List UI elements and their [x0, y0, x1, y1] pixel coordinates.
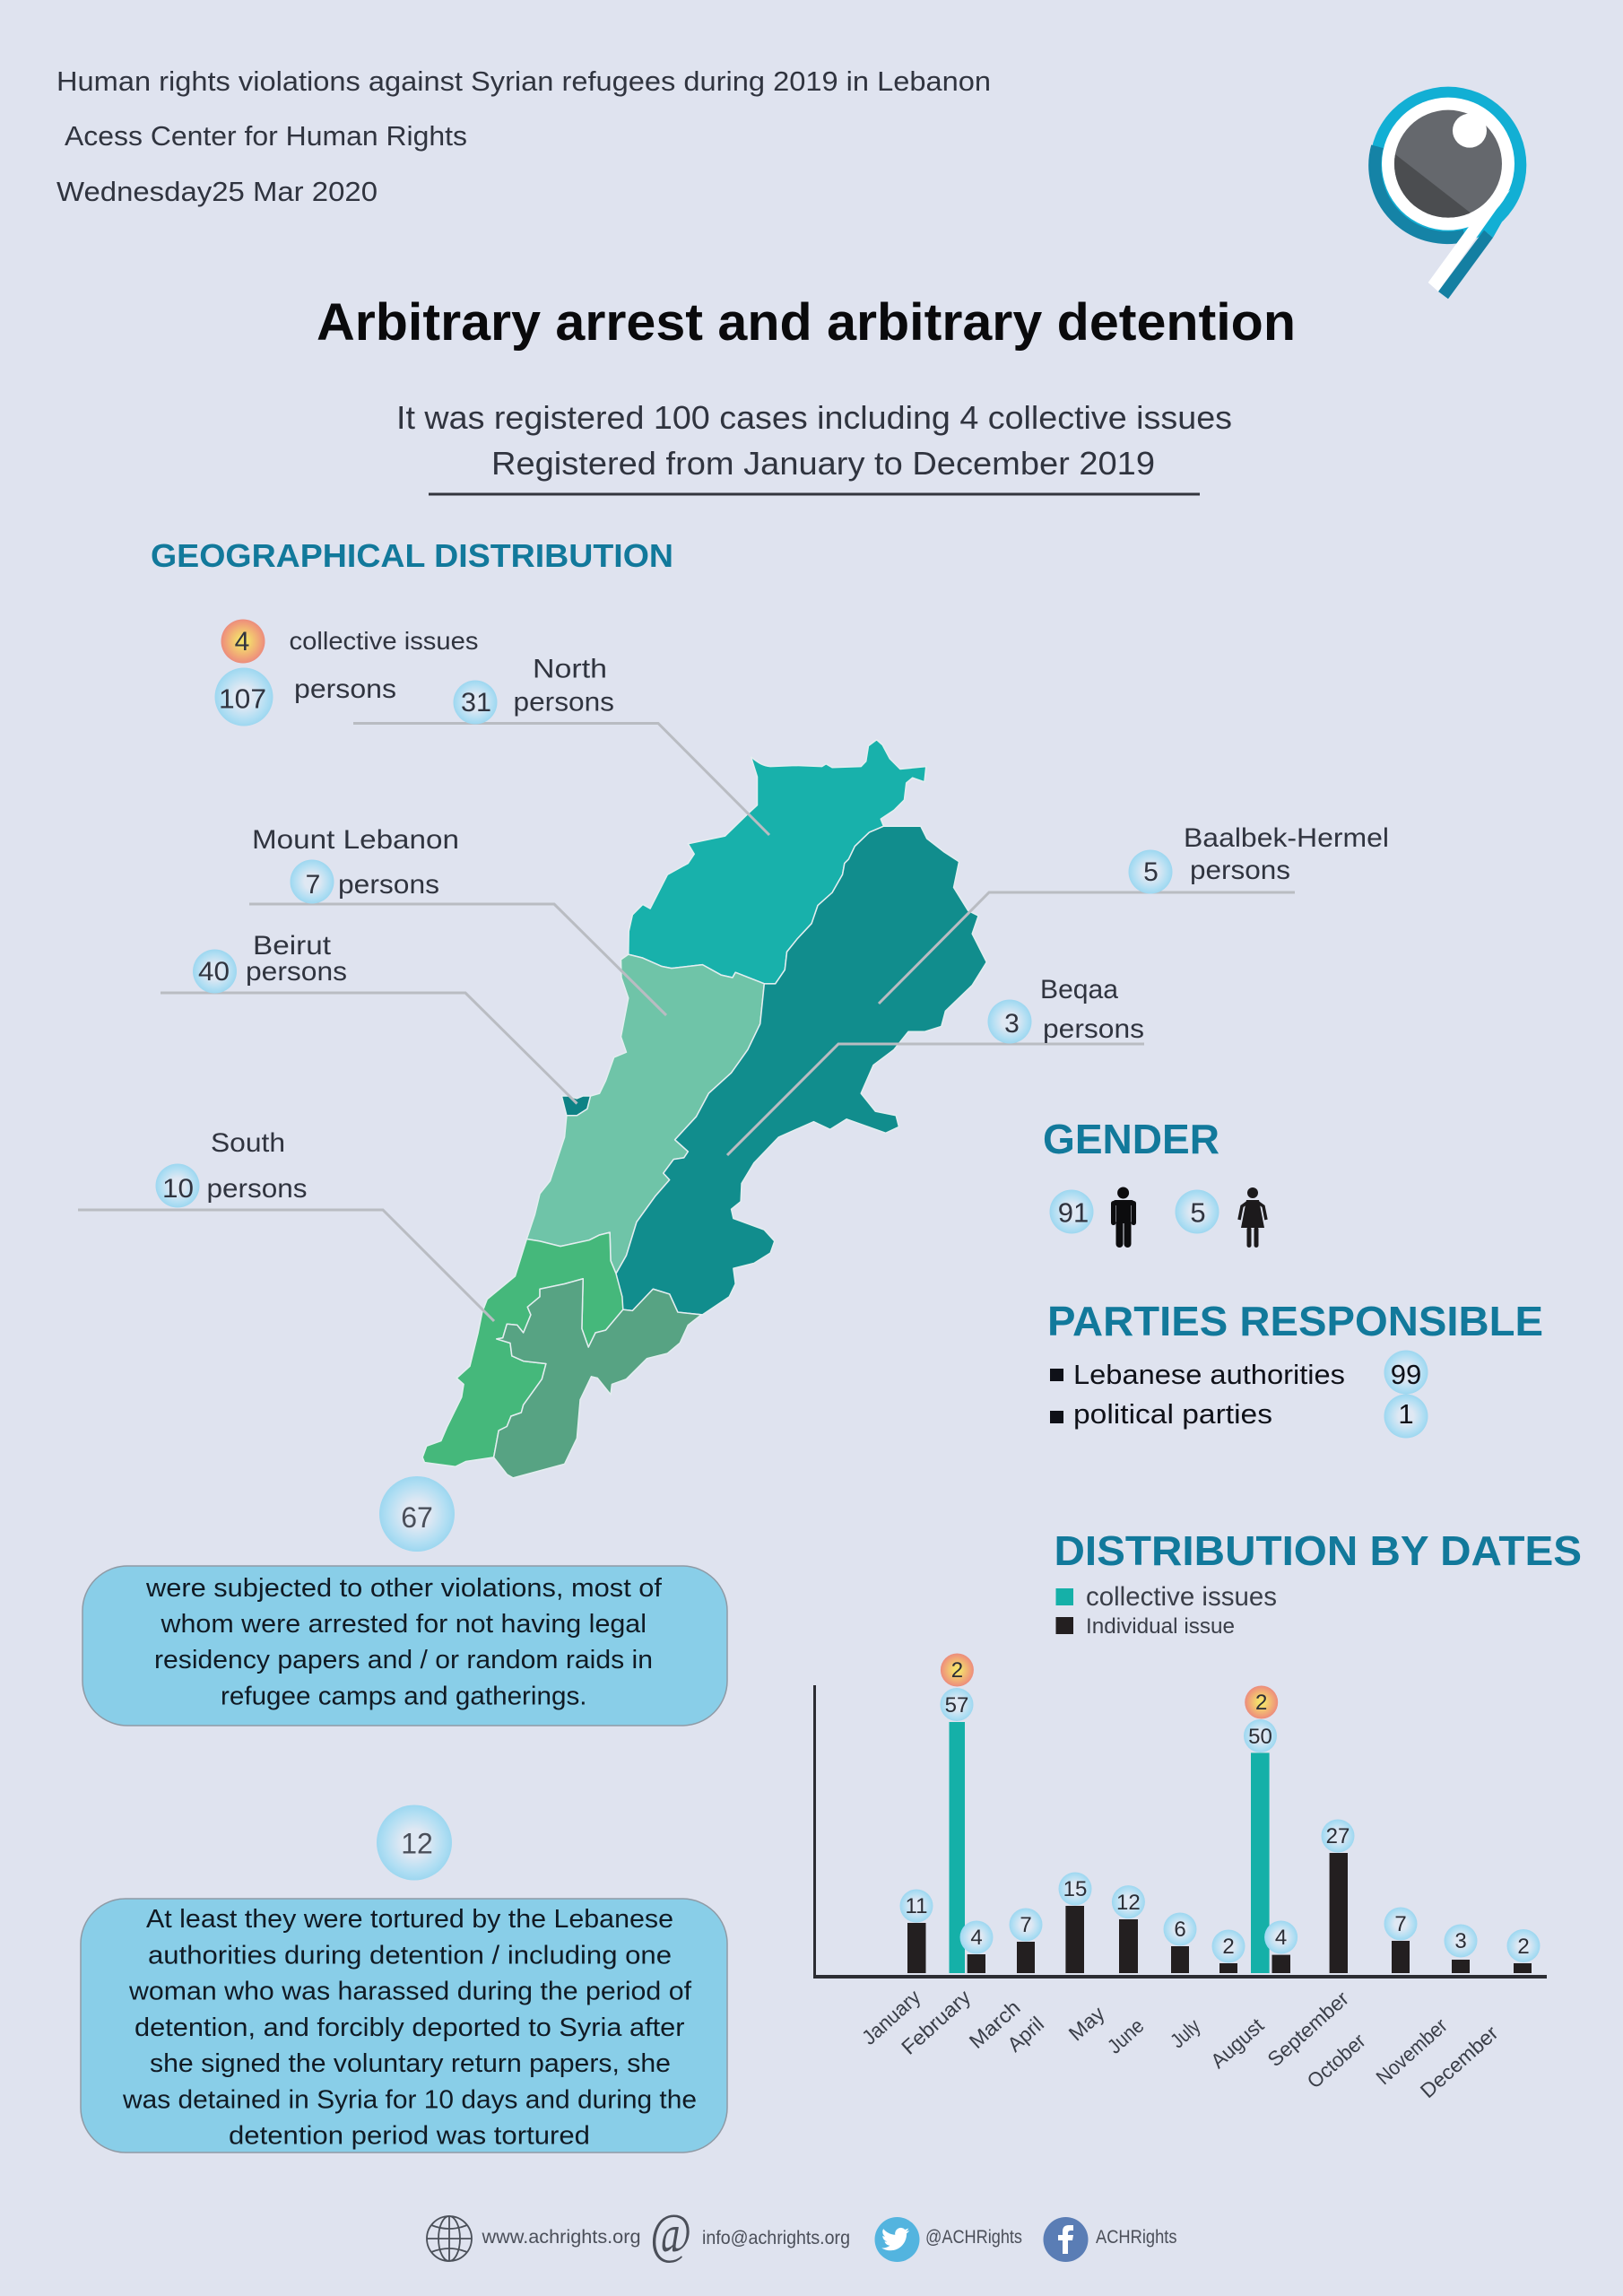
- callout: torture: woman who was harassed during the period of: [128, 1978, 692, 2006]
- header text block: [56, 65, 991, 207]
- label: Mount Lebanon: [252, 825, 459, 904]
- label: Mount Lebanon: Mount Lebanon: [252, 825, 459, 855]
- label: Beqaa: Beqaa: [1040, 975, 1118, 1004]
- icon: twitter: [875, 2217, 920, 2262]
- bubble: 107 persons: [215, 667, 273, 726]
- label: South: [156, 1128, 307, 1207]
- logo: eye nine: [1370, 87, 1526, 299]
- bar value bubbles: [900, 1654, 1541, 1962]
- bubble: 12: 12: [401, 1828, 433, 1860]
- panel: parties responsible: [1047, 1298, 1543, 1439]
- bubble: 12: [377, 1805, 452, 1880]
- label: persons: persons: [294, 674, 396, 704]
- bar value bubbles: 4: [970, 1926, 983, 1950]
- month labels: June: [1103, 2013, 1149, 2058]
- label: Beqaa: 3: [1004, 1009, 1020, 1039]
- header text block: Human rights violations against Syrian refugees during 2019 in Lebanon: [56, 65, 991, 97]
- heading: parties responsible: PARTIES RESPONSIBLE: [1047, 1298, 1543, 1344]
- subtitle: [396, 399, 1232, 495]
- label: Beqaa: persons: [1043, 1014, 1144, 1044]
- row: Lebanese authorities: [1050, 1351, 1428, 1394]
- region: South: [422, 1232, 623, 1466]
- label: Beirut: persons: [246, 957, 347, 987]
- month labels: November: [1371, 2013, 1452, 2089]
- label: Beqaa: [988, 975, 1144, 1044]
- subtitle: It was registered 100 cases including 4 collective issues: [396, 399, 1232, 436]
- title: Arbitrary arrest and arbitrary detention: [317, 293, 1296, 352]
- callout: torture: she signed the voluntary return papers, she: [150, 2049, 671, 2078]
- header text block: Acess Center for Human Rights: [65, 120, 467, 152]
- callout: other violations: residency papers and / or random raids in: [154, 1646, 653, 1674]
- bubble: 4 collective: 4: [235, 627, 249, 657]
- label: Beirut: Beirut: [253, 931, 332, 961]
- bar value bubbles: 4: [1275, 1926, 1287, 1950]
- twitter handle: @ACHRights: [925, 2227, 1022, 2248]
- bar value bubbles: 3: [1454, 1929, 1467, 1953]
- bar value bubbles: 27: [1326, 1824, 1350, 1848]
- bar value bubbles: 15: [1063, 1877, 1087, 1901]
- icon: woman: [1239, 1187, 1266, 1248]
- row: political parties: 1: [1398, 1398, 1414, 1430]
- bar value bubbles: 2: [1255, 1691, 1267, 1715]
- bubble: 67: 67: [401, 1501, 433, 1534]
- callout: other violations: [82, 1566, 727, 1726]
- bubble: 91 men: 91: [1058, 1196, 1089, 1229]
- label: Beirut: 40: [198, 957, 230, 987]
- month labels: July: [1166, 2013, 1205, 2052]
- leader lines: [78, 723, 1295, 1321]
- month labels: September: [1263, 1987, 1353, 2071]
- label: Beirut: [193, 931, 347, 994]
- website: www.achrights.org: [481, 2227, 640, 2248]
- icon: man: [1111, 1187, 1136, 1248]
- row: political parties: [1050, 1394, 1428, 1439]
- callout: torture: [81, 1899, 727, 2152]
- footer: [427, 2204, 1176, 2265]
- month labels: August: [1206, 2013, 1269, 2073]
- header text block: Wednesday25 Mar 2020: [56, 176, 378, 207]
- bar value bubbles: 12: [1116, 1891, 1141, 1915]
- callout: torture: detention, and forcibly deported to Syria after: [135, 2013, 685, 2042]
- map of Lebanon: [422, 740, 986, 1478]
- bar value bubbles: 2: [951, 1658, 963, 1683]
- label: North: persons: [513, 687, 614, 718]
- bar value bubbles: 2: [1222, 1935, 1235, 1959]
- month labels: January: [857, 1985, 925, 2049]
- month labels: March: [965, 1996, 1025, 2053]
- bubble: 67: [379, 1476, 455, 1552]
- label: North: North: [533, 655, 607, 683]
- bubble: 4 collective: [221, 619, 265, 664]
- icon: at sign: @: [650, 2204, 691, 2265]
- label: South: South: [211, 1128, 285, 1158]
- icon: facebook: [1044, 2217, 1089, 2262]
- month labels: December: [1416, 2021, 1503, 2102]
- facebook handle: ACHRights: [1096, 2227, 1176, 2248]
- label: North: [454, 655, 614, 725]
- bar value bubbles: 2: [1517, 1935, 1530, 1959]
- heading: gender: GENDER: [1043, 1116, 1219, 1162]
- month labels: [857, 1985, 1503, 2102]
- callout: torture: authorities during detention / including one: [148, 1941, 672, 1970]
- month labels: October: [1302, 2029, 1370, 2093]
- bubble: 107 persons: 107: [219, 683, 266, 714]
- panel: distribution by dates: [813, 1527, 1582, 2102]
- bar value bubbles: 57: [945, 1693, 968, 1718]
- label: Baalbek-Hermel: persons: [1190, 856, 1290, 885]
- legend: collective issues: [1086, 1582, 1277, 1612]
- row: Lebanese authorities: 99: [1391, 1359, 1421, 1390]
- label: South: 10: [162, 1174, 194, 1204]
- row: political parties: political parties: [1073, 1398, 1272, 1430]
- totals legend: [215, 619, 479, 726]
- callout: torture: At least they were tortured by the Lebanese: [146, 1905, 673, 1934]
- region: Mount Lebanon: [526, 954, 764, 1274]
- callout: torture: detention period was tortured: [229, 2121, 590, 2150]
- bar value bubbles: 7: [1020, 1913, 1032, 1937]
- chart axes: [813, 1685, 1547, 1979]
- region: Beirut: [561, 1096, 591, 1116]
- legend: Individual issue: [1086, 1614, 1235, 1639]
- region: Baalbek-Hermel and Beqaa: [616, 826, 986, 1315]
- region: Nabatieh: [494, 1279, 701, 1478]
- panel: gender: [1043, 1116, 1266, 1248]
- label: North: 31: [461, 688, 491, 718]
- email: info@achrights.org: [702, 2228, 850, 2248]
- subtitle: Registered from January to December 2019: [491, 445, 1155, 482]
- bar value bubbles: 6: [1174, 1918, 1186, 1942]
- icon: globe: [427, 2216, 472, 2261]
- bar chart bars: [907, 1722, 1532, 1973]
- region: North: [629, 740, 926, 984]
- legend: [1056, 1582, 1277, 1639]
- bubble: 5 women: 5: [1190, 1196, 1206, 1229]
- callout: other violations: were subjected to other violations, most of: [145, 1574, 663, 1603]
- callout: other violations: refugee camps and gatherings.: [221, 1683, 586, 1711]
- row: Lebanese authorities: Lebanese authorities: [1073, 1359, 1345, 1390]
- label: Baalbek-Hermel: Baalbek-Hermel: [1184, 823, 1389, 853]
- bubble: 5 women: [1175, 1189, 1219, 1234]
- bubble: 91 men: [1049, 1189, 1094, 1234]
- month labels: April: [1002, 2012, 1048, 2057]
- heading: distribution by dates: DISTRIBUTION BY DATES: [1055, 1527, 1582, 1574]
- bar value bubbles: 7: [1394, 1912, 1407, 1936]
- bar value bubbles: 50: [1248, 1725, 1272, 1749]
- callout: torture: was detained in Syria for 10 days and during the: [122, 2086, 697, 2115]
- bar value bubbles: 11: [906, 1894, 927, 1918]
- label: Mount Lebanon: 7: [306, 870, 320, 900]
- heading: geographical distribution: GEOGRAPHICAL DISTRIBUTION: [151, 537, 673, 574]
- label: Mount Lebanon: persons: [338, 870, 439, 900]
- callout: other violations: whom were arrested for not having legal: [160, 1610, 647, 1639]
- label: South: persons: [206, 1174, 307, 1204]
- month labels: February: [897, 1985, 976, 2059]
- month labels: May: [1064, 2001, 1109, 2045]
- label: Baalbek-Hermel: 5: [1143, 857, 1159, 887]
- label: Baalbek-Hermel: [1128, 823, 1389, 893]
- label: collective issues: collective issues: [289, 627, 479, 655]
